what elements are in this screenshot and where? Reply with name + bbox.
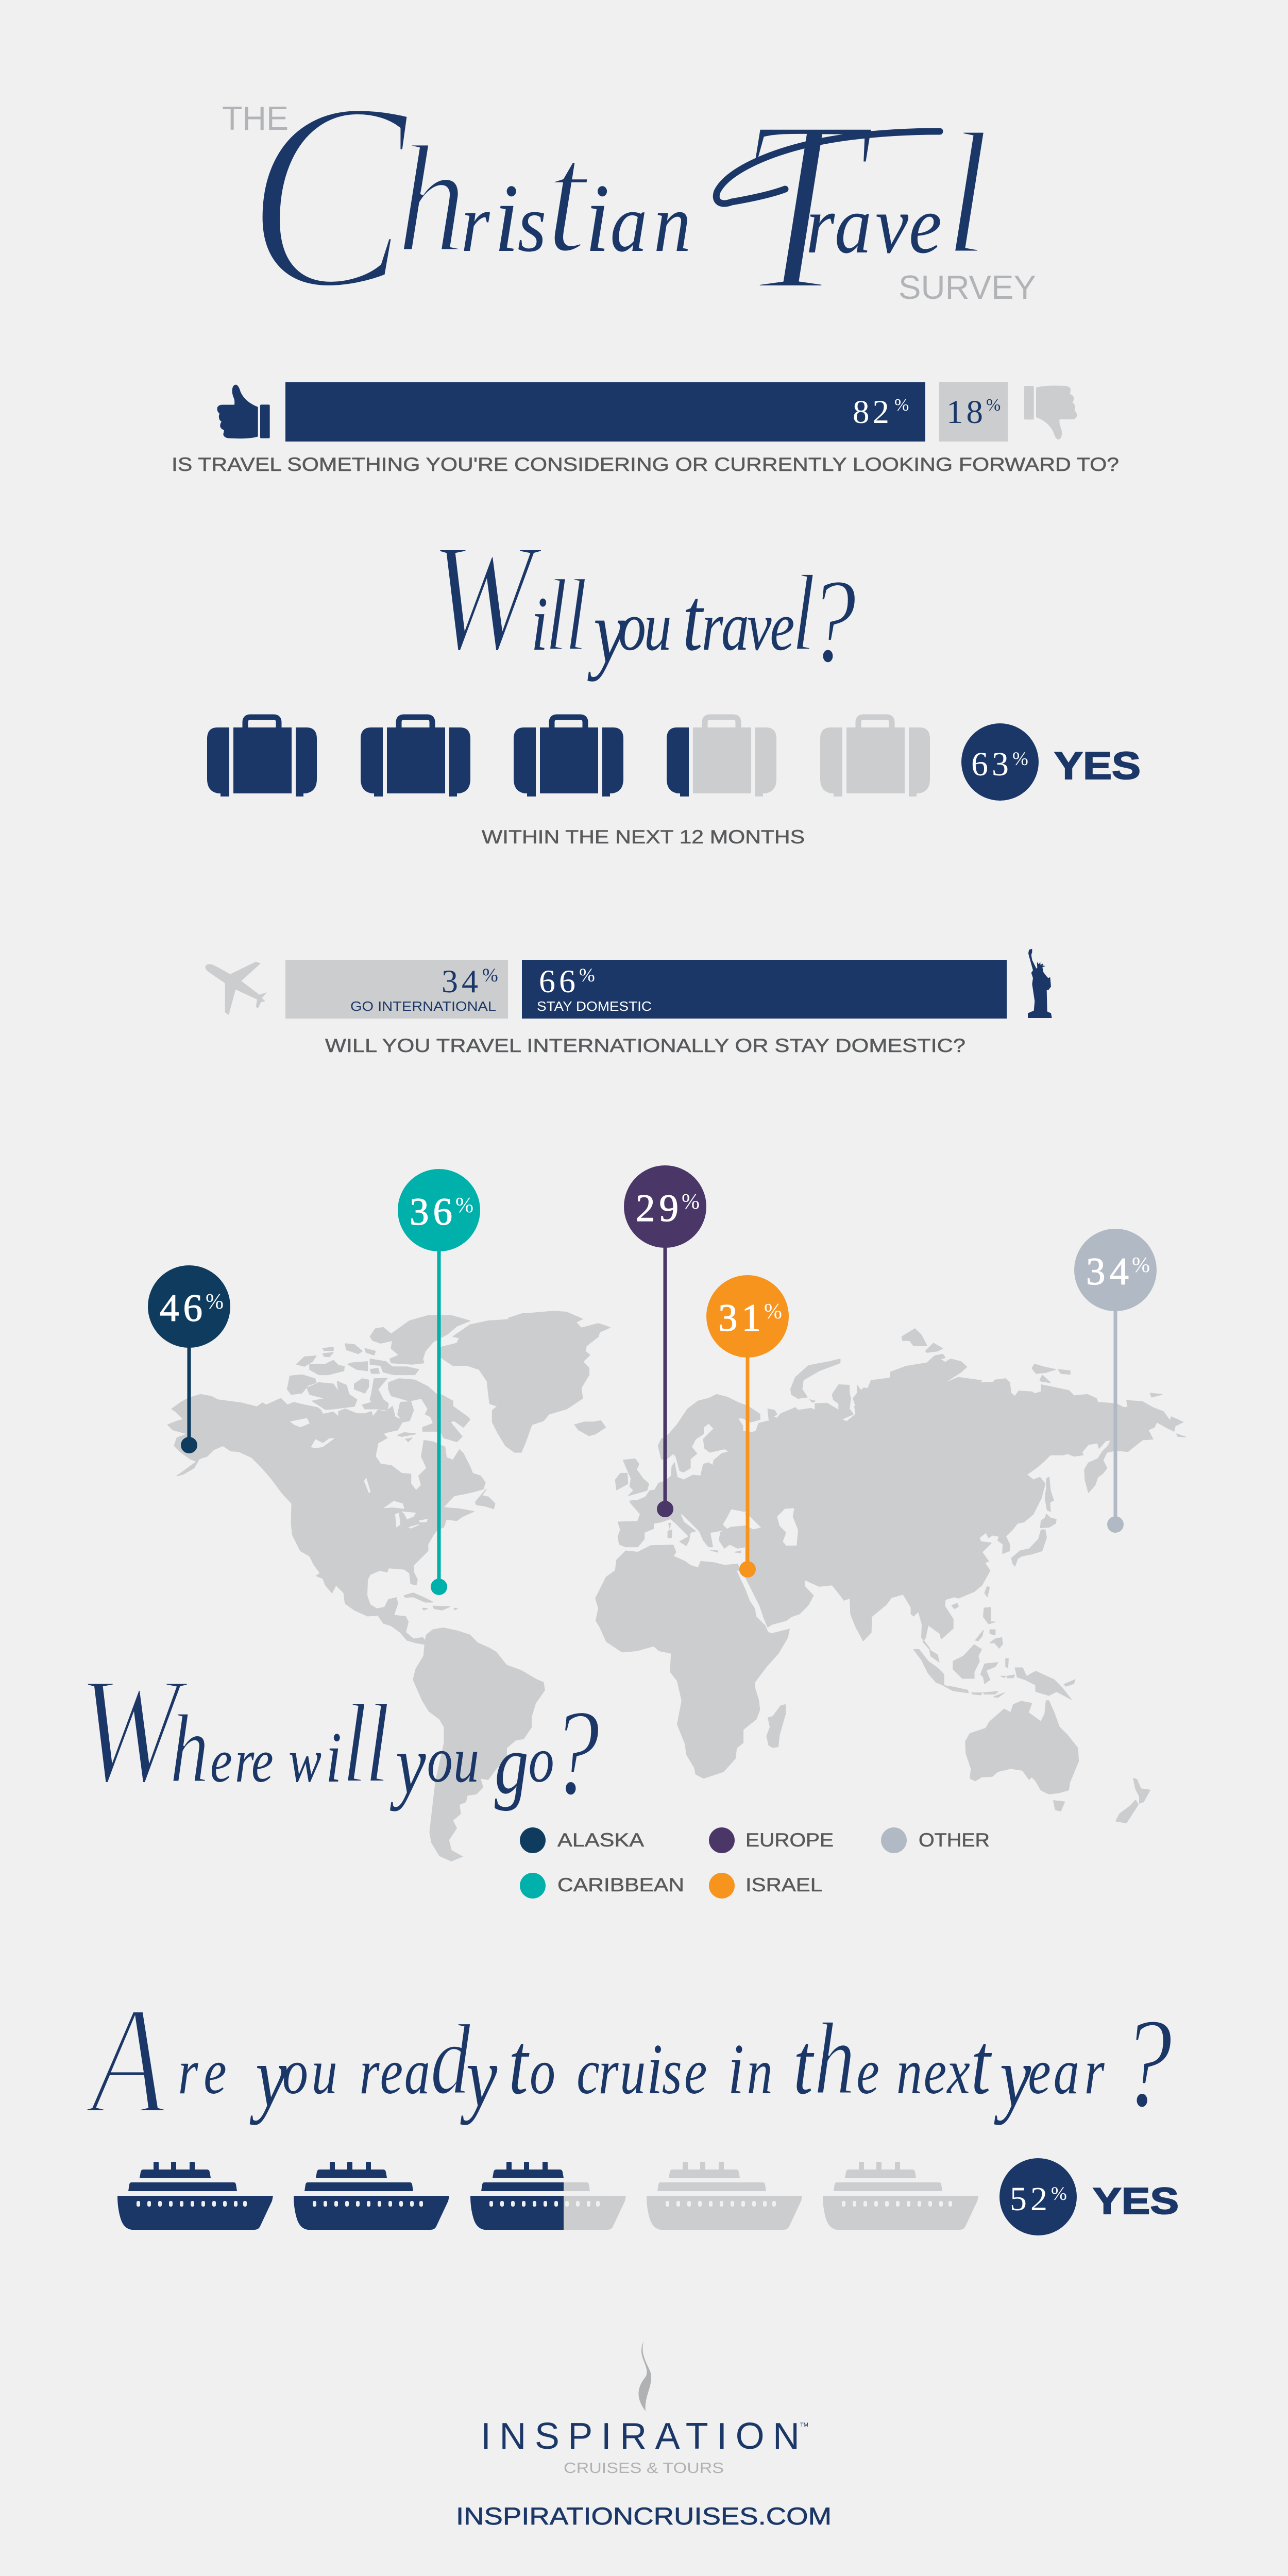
heading: Will you travel?: t bbox=[683, 570, 704, 670]
pin: Caribbean 36%: % bbox=[455, 1194, 473, 1217]
legend bbox=[520, 1827, 990, 1899]
icon: ship 3 partial bbox=[470, 2162, 626, 2230]
icon: ship 2 bbox=[294, 2162, 449, 2230]
icon: ship 1 bbox=[117, 2162, 273, 2230]
title: Christian Travel script: s bbox=[517, 177, 546, 269]
icon: suitcase 2 bbox=[361, 717, 470, 796]
heading: Where will you go?: r bbox=[235, 1726, 255, 1795]
title: Christian Travel script: t bbox=[546, 109, 591, 285]
heading: Will you travel?: o bbox=[618, 588, 646, 665]
heading: Where will you go?: g bbox=[495, 1718, 529, 1811]
title: Christian Travel script: i bbox=[494, 164, 519, 273]
title: SURVEY: SURVEY bbox=[899, 268, 1036, 306]
heading: Will you travel?: l bbox=[791, 552, 816, 673]
pin: Other 34%: % bbox=[1132, 1253, 1150, 1277]
legend item: Caribbean bbox=[520, 1873, 684, 1899]
heading: Are you ready to cruise in the next year?: y bbox=[994, 2029, 1031, 2126]
badge: 63% bbox=[961, 723, 1039, 801]
heading: Will you travel?: u bbox=[644, 588, 686, 665]
heading: Are you ready to cruise in the next year?: h bbox=[814, 2002, 855, 2116]
heading: Will you travel?: e bbox=[770, 588, 794, 665]
trademark: TM bbox=[800, 2422, 808, 2428]
panel: international vs domestic bbox=[205, 949, 1052, 1056]
pin: Europe 29%: 29 bbox=[636, 1187, 683, 1230]
pin: Other 34% bbox=[1074, 1229, 1157, 1533]
badge: 63%: 63 bbox=[971, 745, 1012, 783]
icon: suitcase 3 bbox=[514, 717, 623, 796]
icon: thumbs up bbox=[217, 385, 270, 438]
icon: flame swirl bbox=[639, 2341, 651, 2411]
panel: considering travel bar bbox=[172, 382, 1119, 475]
legend item: Other: OTHER bbox=[919, 1829, 990, 1851]
heading: Are you ready to cruise in the next year?: c bbox=[577, 2037, 600, 2108]
heading: Are you ready to cruise in the next year?: e bbox=[684, 2037, 720, 2108]
legend item: Caribbean: CARIBBEAN bbox=[557, 1874, 684, 1895]
heading: Where will you go?: e bbox=[210, 1726, 232, 1795]
icon: suitcase 1 bbox=[207, 717, 317, 796]
heading: Are you ready to cruise in the next year?: s bbox=[662, 2037, 682, 2108]
bar: 18 percent no bbox=[939, 382, 1008, 442]
heading: Are you ready to cruise in the next year?: n bbox=[747, 2037, 786, 2108]
title: Christian Travel script: C bbox=[246, 46, 413, 346]
title: Christian Travel script: n bbox=[654, 177, 709, 269]
legend item: Alaska: ALASKA bbox=[557, 1829, 644, 1851]
value: 18%: 18 bbox=[946, 394, 986, 431]
pin: Israel 31% bbox=[706, 1275, 789, 1578]
heading: Where will you go?: o bbox=[427, 1725, 453, 1796]
heading: Are you ready to cruise in the next year?: r bbox=[599, 2037, 619, 2108]
pin: Israel 31%: 31 bbox=[718, 1297, 765, 1340]
brand name: INSPIRATION bbox=[481, 2416, 800, 2457]
pin: Caribbean 36% bbox=[398, 1169, 480, 1595]
badge: 52%: % bbox=[1051, 2183, 1067, 2205]
heading: Where will you go?: W bbox=[78, 1646, 191, 1815]
heading: Will you travel?: W bbox=[430, 512, 544, 683]
caption: question one: IS TRAVEL SOMETHING YOU'RE CONSIDERING OR CURRENTLY LOOKING FORWARD TO? bbox=[172, 454, 1119, 475]
heading: Are you ready to cruise in the next year?: a bbox=[404, 2037, 430, 2108]
heading: Are you ready to cruise in the next year?: u bbox=[312, 2037, 350, 2108]
heading: Will you travel?: r bbox=[702, 588, 723, 665]
heading: Will you travel?: i bbox=[531, 581, 548, 667]
label: YES: YES bbox=[1054, 744, 1141, 787]
world map bbox=[168, 1311, 1186, 1861]
heading: Are you ready to cruise in the next year?: t bbox=[971, 2016, 1008, 2113]
title: Christian Travel script: r bbox=[461, 177, 490, 269]
heading: Are you ready to cruise in the next year?: e bbox=[856, 2037, 892, 2108]
value: 18%: % bbox=[986, 396, 1001, 415]
heading: Where will you go?: o bbox=[529, 1725, 554, 1796]
bar: 82 percent yes bbox=[285, 382, 925, 442]
heading: Are you ready to cruise in the next year?: ? bbox=[1121, 1991, 1172, 2134]
heading: Are you ready to cruise in the next year?: i bbox=[728, 2029, 744, 2109]
icon: suitcase 4 partial bbox=[667, 717, 776, 796]
heading: Will you travel?: v bbox=[747, 588, 772, 665]
heading: Are you ready to cruise in the next year?: d bbox=[430, 2005, 471, 2115]
heading: Where will you go?: ? bbox=[550, 1684, 600, 1821]
heading: Where will you go?: l bbox=[365, 1681, 413, 1807]
heading: Are you ready to cruise in the next year?: n bbox=[896, 2037, 922, 2108]
heading: Are you ready to cruise in the next year?: a bbox=[1054, 2037, 1079, 2108]
bar: go international: GO INTERNATIONAL bbox=[350, 998, 496, 1014]
title: Christian Travel script: l bbox=[945, 96, 989, 291]
label: YES: YES bbox=[1093, 2181, 1179, 2222]
decorative swash on the T bbox=[716, 131, 940, 204]
heading: Are you ready to cruise in the next year?: e bbox=[380, 2037, 403, 2108]
heading: Will you travel?: l bbox=[545, 558, 568, 672]
heading: Are you ready to cruise in the next year?: o bbox=[530, 2037, 568, 2108]
value: 82%: 82 bbox=[853, 394, 892, 431]
title: Christian Travel script: r bbox=[806, 179, 835, 270]
heading: Are you ready to cruise in the next year?: e bbox=[1028, 2037, 1051, 2108]
value: 82%: % bbox=[894, 396, 909, 415]
pin: Alaska 46%: % bbox=[206, 1290, 224, 1314]
pin: Caribbean 36%: 36 bbox=[410, 1191, 456, 1233]
website url: INSPIRATIONCRUISES.COM bbox=[456, 2502, 832, 2530]
heading: Will you travel?: a bbox=[721, 588, 749, 665]
heading: Are you ready to cruise in the next year?: o bbox=[282, 2037, 308, 2108]
title: Christian Travel script: i bbox=[585, 164, 609, 273]
caption: within the next 12 months: WITHIN THE NEXT 12 MONTHS bbox=[482, 826, 805, 848]
icon: airplane bbox=[205, 962, 267, 1015]
legend item: Europe bbox=[709, 1827, 834, 1853]
heading: Where will you go?: y bbox=[390, 1718, 426, 1811]
title: Christian Travel script: T bbox=[737, 68, 876, 342]
panel: suitcases 63 percent bbox=[207, 717, 1141, 848]
heading: Will you travel?: y bbox=[587, 582, 626, 682]
icon: thumbs down bbox=[1024, 385, 1077, 439]
pin: Other 34%: 34 bbox=[1086, 1250, 1133, 1293]
heading: Will you travel?: ? bbox=[808, 554, 856, 688]
icon: ship 5 bbox=[823, 2162, 978, 2230]
heading: Are you ready to cruise in the next year?: r bbox=[360, 2037, 380, 2108]
heading: Will you travel?: l bbox=[565, 558, 608, 672]
badge: 52% bbox=[999, 2158, 1077, 2235]
heading: Are you ready to cruise in the next year?: e bbox=[924, 2037, 946, 2108]
logo bbox=[481, 2341, 808, 2477]
heading: Are you ready to cruise in the next year?: e bbox=[204, 2037, 240, 2108]
heading: Where will you go?: h bbox=[170, 1695, 209, 1803]
badge: 63%: % bbox=[1012, 749, 1028, 770]
pin: Europe 29%: % bbox=[682, 1190, 700, 1214]
legend item: Europe: EUROPE bbox=[745, 1829, 834, 1851]
tagline: CRUISES & TOURS bbox=[564, 2460, 724, 2477]
heading: Are you ready to cruise in the next year?: t bbox=[509, 2016, 530, 2113]
title: THE: THE bbox=[222, 99, 289, 137]
pin: Alaska 46%: 46 bbox=[160, 1287, 207, 1330]
pin: Europe 29% bbox=[624, 1165, 706, 1517]
heading: Where will you go?: u bbox=[453, 1725, 492, 1796]
icon: ship 4 bbox=[647, 2162, 802, 2230]
bar: go international bbox=[285, 960, 508, 1019]
bar: stay domestic bbox=[522, 960, 1007, 1019]
heading: Are you ready to cruise in the next year?: y bbox=[460, 2029, 515, 2126]
legend item: Israel bbox=[709, 1873, 822, 1899]
legend item: Other bbox=[881, 1827, 990, 1853]
pin: Israel 31%: % bbox=[764, 1300, 782, 1324]
bar: stay domestic: STAY DOMESTIC bbox=[537, 998, 652, 1014]
heading: Where will you go?: e bbox=[251, 1726, 286, 1795]
panel: cruise ships 52 percent bbox=[117, 2158, 1179, 2235]
bar: go international: 34 bbox=[442, 963, 482, 999]
heading: Where will you go?: l bbox=[342, 1681, 367, 1807]
heading: Are you ready to cruise in the next year?: i bbox=[647, 2029, 663, 2109]
title block bbox=[222, 46, 1036, 346]
bar: go international: % bbox=[482, 965, 498, 986]
heading: Are you ready to cruise in the next year?: t bbox=[793, 2016, 815, 2113]
pin: Alaska 46% bbox=[148, 1265, 230, 1453]
title: Christian Travel script: h bbox=[397, 113, 466, 284]
legend item: Alaska bbox=[520, 1827, 644, 1853]
bar: stay domestic: 66 bbox=[539, 963, 579, 999]
heading: Are you ready to cruise in the next year?: A bbox=[83, 1975, 168, 2146]
icon: suitcase 5 bbox=[820, 717, 930, 796]
title: Christian Travel script: e bbox=[909, 179, 942, 270]
icon: statue of liberty bbox=[1028, 949, 1052, 1018]
heading: Are you ready to cruise in the next year?: u bbox=[620, 2037, 646, 2108]
heading: Are you ready to cruise in the next year?: y bbox=[250, 2029, 287, 2126]
title: Christian Travel script: a bbox=[835, 179, 872, 270]
title: Christian Travel script: v bbox=[875, 179, 909, 270]
bar: stay domestic: % bbox=[579, 965, 595, 986]
title: Christian Travel script: a bbox=[610, 177, 647, 269]
heading: Are you ready to cruise in the next year?: x bbox=[946, 2037, 970, 2108]
heading: Are you ready to cruise in the next year?: r bbox=[178, 2037, 198, 2108]
legend item: Israel: ISRAEL bbox=[745, 1874, 822, 1895]
heading: Where will you go?: w bbox=[289, 1726, 321, 1795]
badge: 52%: 52 bbox=[1010, 2180, 1051, 2218]
heading: Where will you go?: i bbox=[326, 1718, 342, 1798]
heading: Are you ready to cruise in the next year?: r bbox=[1084, 2037, 1105, 2108]
caption: question two: WILL YOU TRAVEL INTERNATIONALLY OR STAY DOMESTIC? bbox=[325, 1035, 965, 1056]
